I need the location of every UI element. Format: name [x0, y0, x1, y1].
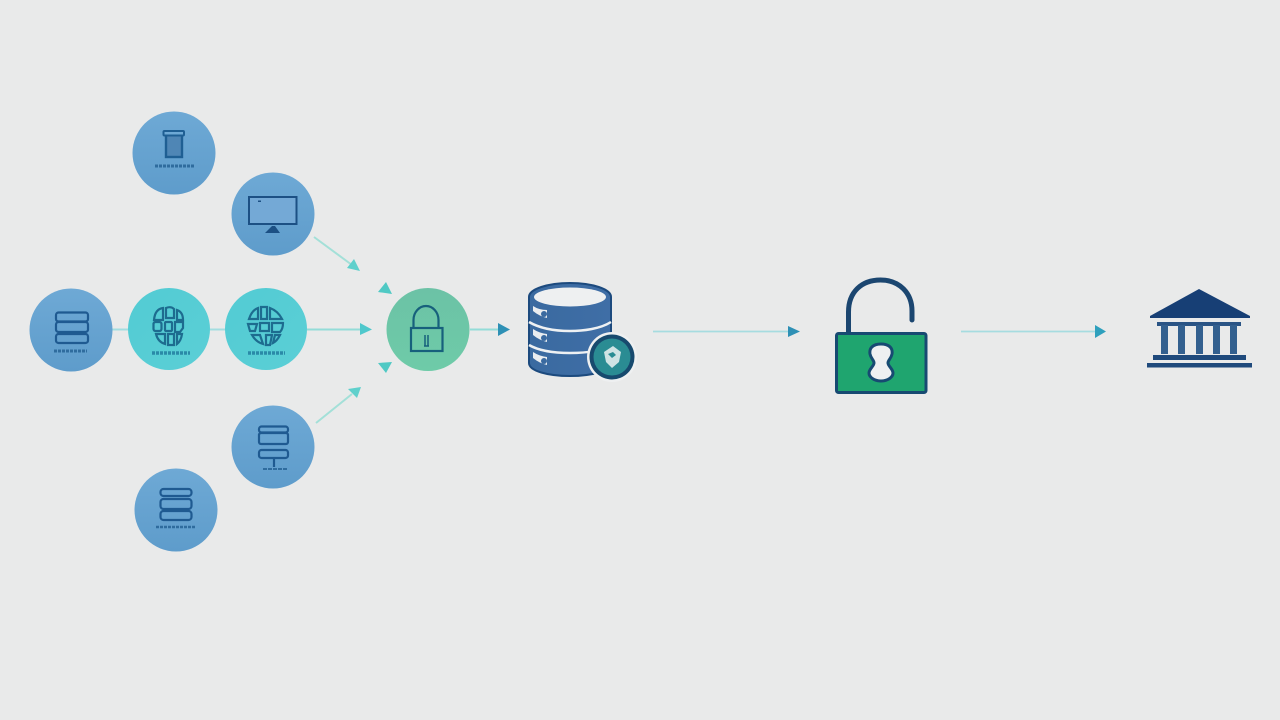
node: document source [132, 112, 216, 194]
icon: stacked layers [56, 312, 88, 343]
arrow: middle row to lock node [307, 323, 372, 335]
icon: circuit brain [154, 307, 183, 345]
icon: stacked layers [160, 489, 192, 520]
connector lines between the middle-row circles [112, 328, 226, 330]
icon: circuit brain [248, 307, 283, 345]
node: database source [134, 468, 218, 552]
bank columns [1161, 325, 1237, 354]
keyhole [869, 344, 893, 381]
icon: open padlock [836, 280, 926, 392]
node: stacked data source [30, 288, 112, 372]
arrow: server node to lock node [316, 387, 361, 423]
node: monitor source [232, 172, 314, 256]
database tier dividers [529, 322, 611, 353]
small arrowhead: lower [378, 362, 392, 373]
arrow: open lock to bank [961, 325, 1106, 338]
node: teal processing one [128, 288, 210, 370]
node: green encryption lock [386, 288, 470, 371]
icon: document [164, 131, 184, 157]
badge [587, 332, 637, 382]
arrow: lock node to database [470, 323, 510, 336]
node: server source [232, 406, 314, 488]
icon: database with badge [529, 283, 637, 382]
icon: padlock [411, 306, 442, 351]
icon: server [259, 426, 288, 467]
arrow: database to open lock [653, 326, 800, 337]
icon: monitor [249, 197, 296, 233]
small arrowhead: upper [378, 282, 392, 294]
database indicator lights [533, 306, 547, 365]
node: teal processing two [225, 288, 307, 370]
arrow: monitor node to lock node [314, 237, 360, 271]
icon: bank building [1147, 289, 1252, 368]
